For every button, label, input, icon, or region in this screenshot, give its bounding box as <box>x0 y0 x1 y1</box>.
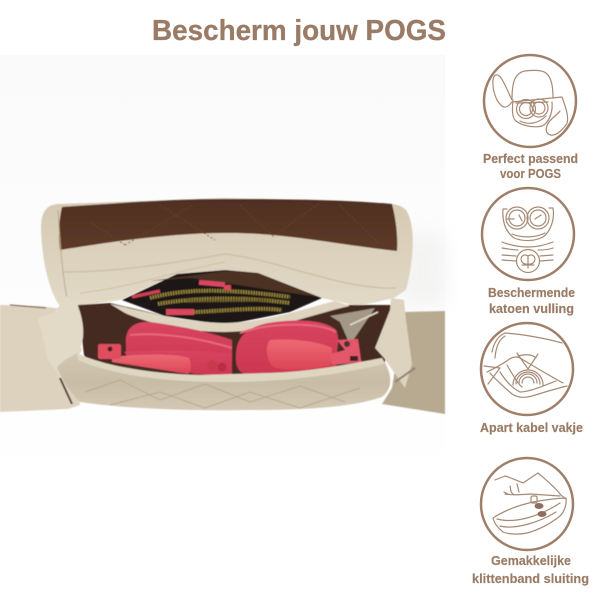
label: Perfect passend <box>483 152 578 166</box>
top flap: brown panel <box>59 199 397 251</box>
flap stitching and folds <box>58 210 68 303</box>
right side wing <box>375 298 412 388</box>
label <box>488 286 575 316</box>
icon: hand opening velcro closure <box>481 458 573 550</box>
label: voor POGS <box>500 167 561 181</box>
label: Beschermende <box>488 286 575 300</box>
feature: separate cable pocket <box>480 323 583 435</box>
cable pocket <box>122 270 322 325</box>
label: katoen vulling <box>489 302 574 316</box>
icon: headphones over cotton layers <box>482 188 574 280</box>
label: Apart kabel vakje <box>480 421 583 435</box>
label <box>483 152 578 181</box>
icon detail: velcro dots <box>534 503 546 517</box>
product photo: headphone bag <box>0 55 445 490</box>
photo background <box>0 55 445 490</box>
left strap <box>0 305 80 412</box>
lower pocket lip <box>110 301 350 332</box>
front quilted panel <box>57 353 390 410</box>
label: Gemakkelijke <box>491 554 571 568</box>
left side wing <box>38 296 83 368</box>
feature: cotton padding <box>482 188 575 316</box>
label <box>472 554 589 586</box>
title: Bescherm jouw POGS <box>152 15 446 47</box>
feature: velcro closure <box>472 458 589 586</box>
feature: perfect fit <box>483 55 578 181</box>
label: klittenband sluiting <box>472 572 589 586</box>
icon: bag with headphones <box>484 55 576 147</box>
right strap <box>382 311 445 414</box>
top flap: beige rim <box>41 198 413 306</box>
left headphone <box>98 322 232 376</box>
bag illustration <box>0 198 445 414</box>
icon: bag pocket with cable <box>481 323 573 415</box>
right headphone <box>236 321 362 375</box>
cables <box>150 291 290 298</box>
interior <box>78 303 392 380</box>
